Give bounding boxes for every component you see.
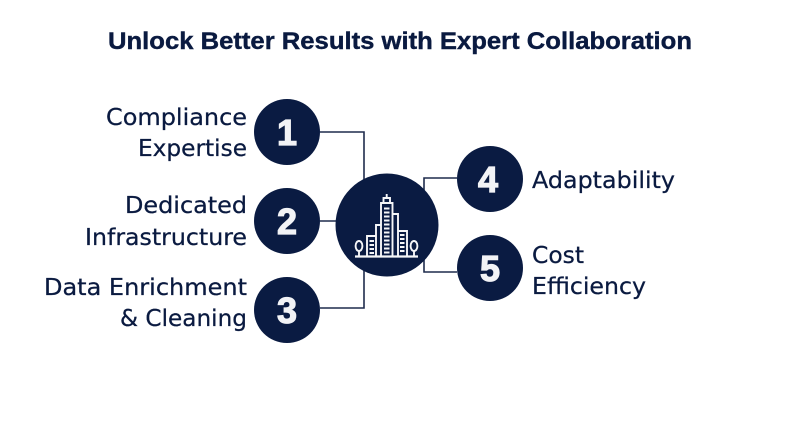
label 5 — [532, 243, 646, 300]
badge 4 — [457, 146, 523, 212]
item 2: Dedicated Infrastructure — [85, 188, 320, 254]
label 5: Efficiency — [532, 274, 646, 300]
badge 5: 5 — [480, 248, 500, 289]
label 1: Expertise — [138, 136, 247, 162]
label 1: Compliance — [106, 105, 247, 131]
badge 3 — [254, 277, 320, 343]
label 3: & Cleaning — [120, 306, 247, 332]
item 1: Compliance Expertise — [106, 99, 320, 165]
badge 5 — [457, 235, 523, 301]
label 2: Infrastructure — [85, 225, 247, 251]
label 1 — [106, 105, 247, 162]
badge 1 — [254, 99, 320, 165]
icon: city buildings — [355, 194, 418, 256]
connector lines — [320, 132, 457, 308]
item 3: Data Enrichment & Cleaning — [44, 275, 320, 343]
title: Unlock Better Results with Expert Collaboration — [108, 28, 692, 55]
label 2: Dedicated — [125, 193, 247, 219]
label 5: Cost — [532, 243, 584, 269]
label 2 — [85, 193, 247, 251]
badge 2: 2 — [277, 201, 297, 242]
item 5: Cost Efficiency — [457, 235, 646, 301]
item 4: Adaptability — [457, 146, 675, 212]
central hub with city icon — [336, 174, 438, 276]
badge 1: 1 — [277, 112, 297, 153]
label 3: Data Enrichment — [44, 275, 247, 301]
badge 2 — [254, 188, 320, 254]
label 3 — [44, 275, 247, 332]
badge 3: 3 — [277, 290, 297, 331]
label 4: Adaptability — [532, 168, 675, 194]
badge 4: 4 — [478, 159, 498, 200]
